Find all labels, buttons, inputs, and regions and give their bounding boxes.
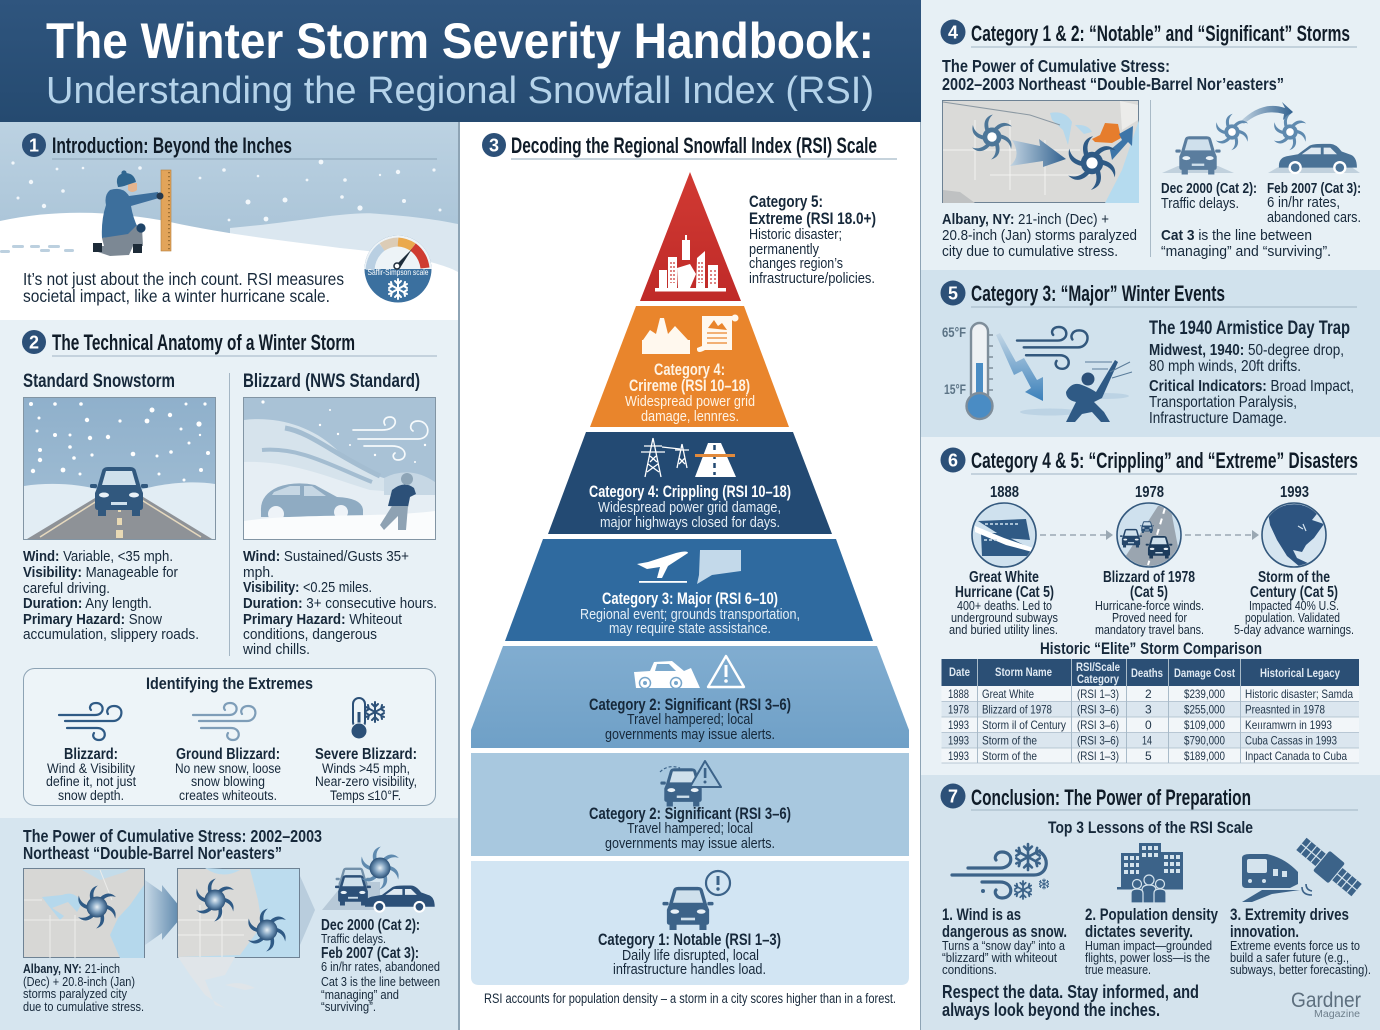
lesson 1: dangerous as snow. — [942, 922, 1067, 941]
illustration: standard snowstorm road — [24, 398, 216, 540]
text: storm of the century: population. Validated — [1245, 611, 1340, 625]
text: cat 3 line: Cat 3 is the line between — [1161, 227, 1312, 244]
text: feb 2007: abandoned cars. — [1267, 210, 1361, 226]
map: north america storms — [178, 868, 300, 1008]
sub-heading: Northeast “Double-Barrel Nor'easters” — [23, 843, 282, 863]
tier: category 2 significant lower — [471, 753, 909, 856]
table row 1888: 2 — [1145, 687, 1152, 701]
heading badge 7: 7 — [948, 786, 958, 806]
text: albany — [942, 211, 1137, 260]
table row 1993 b: Cuba Cassas in 1993 — [1245, 734, 1337, 748]
table header row: Category — [1077, 674, 1119, 686]
illustration: blizzard whiteout — [244, 398, 436, 540]
table row 1978: (RSI 3–6) — [1077, 702, 1119, 716]
tier: category 1 notable — [471, 861, 909, 985]
arrow: towards cars — [300, 876, 315, 945]
lesson 2: dictates severity. — [1085, 922, 1193, 941]
text: dec 2000: Traffic delays. — [1161, 196, 1239, 212]
heading badge 4: 4 — [948, 22, 958, 42]
icon: car and warning — [660, 761, 721, 806]
sub-heading — [942, 56, 1284, 94]
sub-heading — [23, 826, 322, 863]
intro text: It’s not just about the inch count. RSI measures — [23, 269, 344, 289]
table header row: Date — [949, 667, 970, 679]
table header row: Storm Name — [995, 667, 1052, 679]
panel: section 3 RSI pyramid — [471, 133, 909, 1006]
lesson 3: Extreme events force us to — [1230, 938, 1360, 953]
icon: thermometer — [966, 323, 993, 419]
sub-heading: 2002–2003 Northeast “Double-Barrel Nor’easters” — [942, 74, 1284, 94]
intro text: societal impact, like a winter hurricane scale. — [23, 286, 330, 306]
table row 1993 c — [948, 749, 1347, 763]
table row 1888: Historic disaster; Samda — [1245, 687, 1353, 701]
logo: gardner magazine: Gardner — [1291, 989, 1361, 1012]
title: The Winter Storm Severity Handbook: — [46, 13, 874, 69]
heading: Introduction: Beyond the Inches — [52, 133, 292, 158]
tier: category 3 major — [505, 539, 873, 641]
table row 1978: Preasnted in 1978 — [1245, 702, 1325, 716]
table row 1978: $255,000 — [1184, 702, 1225, 716]
table row 1888 — [948, 687, 1353, 701]
table header row: RSI/Scale — [1076, 662, 1120, 674]
text: great white hurricane: and buried utility lines. — [949, 623, 1058, 637]
table row 1993 c: (RSI 1–3) — [1077, 749, 1119, 763]
icon: thermometer with snowflake — [351, 698, 384, 739]
header banner — [0, 0, 921, 122]
table row 1993 b: $790,000 — [1184, 734, 1225, 748]
table header row: Historical Legacy — [1260, 668, 1341, 680]
text: category 2 lower: governments may issue alerts. — [605, 836, 775, 852]
tier: category 4 crippling navy — [548, 432, 832, 534]
text: dec 2000 and feb 2007: Dec 2000 (Cat 2): — [321, 917, 420, 934]
tier: category 2 significant upper — [471, 646, 909, 748]
tier: category 5 — [640, 172, 741, 301]
text: dec 2000 and feb 2007: Traffic delays. — [321, 932, 386, 946]
text: 1940 armistice: Midwest, 1940: 50-degree drop, — [1149, 342, 1344, 359]
text: storm of the century: Century (Cat 5) — [1250, 584, 1338, 601]
text: ground blizzard: No new snow, loose — [175, 761, 281, 776]
table row 1993 a: $109,000 — [1184, 718, 1225, 732]
icon: person measuring snow — [93, 170, 171, 256]
table row 1993 a: 0 — [1145, 718, 1152, 732]
text: severe blizzard: Temps ≤10°F. — [330, 788, 401, 803]
text: severe blizzard: Winds >45 mph, — [322, 761, 410, 776]
icon: wind gusts — [1017, 327, 1088, 369]
text: cat 3 line — [1161, 227, 1331, 260]
table row 1993 b: (RSI 3–6) — [1077, 734, 1119, 748]
table row 1978: 3 — [1145, 702, 1152, 716]
text: major: Category 3: Major (RSI 6–10) — [602, 590, 778, 608]
text: category 4 orange: Category 4: — [654, 361, 725, 379]
text: 1940 armistice: Infrastructure Damage. — [1149, 410, 1287, 427]
lesson 1: “blizzard” with whiteout — [942, 950, 1057, 965]
text: albany — [23, 961, 144, 1014]
text: category 4 orange: Crireme (RSI 10–18) — [629, 377, 750, 395]
text: dec 2000 and feb 2007: Cat 3 is the line between — [321, 975, 440, 989]
text: standard snowstorm stats: Primary Hazard: Snow — [23, 611, 162, 628]
logo: gardner magazine — [1291, 989, 1361, 1020]
text: albany: 20.8-inch (Jan) storms paralyzed — [942, 227, 1137, 244]
panel: section 6 category 4 and 5 — [921, 437, 1380, 775]
table: storm comparison — [942, 659, 1359, 763]
lesson 2: true measure. — [1085, 962, 1151, 977]
text: severe blizzard — [315, 746, 417, 803]
text: blizzard stats: Duration: 3+ consecutive hours. — [243, 595, 437, 612]
table row 1993 c: Inpact Canada to Cuba — [1245, 749, 1347, 763]
text: albany: due to cumulative stress. — [23, 999, 144, 1014]
text: ground blizzard: snow blowing — [191, 774, 265, 789]
icon: person in wind — [1020, 360, 1132, 422]
year labels — [990, 484, 1309, 501]
text: category 2 lower: Category 2: Significant (RSI 3–6) — [589, 805, 791, 823]
text: ground blizzard: Ground Blizzard: — [176, 746, 280, 763]
table row 1993 c: 5 — [1145, 749, 1152, 763]
text: dec 2000 and feb 2007 — [321, 917, 440, 1014]
text: blizzard stats: Visibility: <0.25 miles. — [243, 579, 372, 596]
lesson 3: build a safer future (e.g., — [1230, 950, 1349, 965]
text: major — [580, 590, 800, 637]
text: standard snowstorm stats — [23, 548, 199, 643]
text: albany: storms paralyzed city — [23, 986, 127, 1001]
text: standard snowstorm stats: accumulation, slippery roads. — [23, 626, 199, 643]
icon: storms over car — [1162, 102, 1360, 174]
map: northeast storm — [24, 868, 144, 958]
subtitle: Understanding the Regional Snowfall Index (RSI) — [46, 70, 874, 112]
map: usa storm track — [942, 100, 1139, 203]
year labels: 1978 — [1135, 484, 1164, 501]
table row 1978: 1978 — [948, 702, 969, 716]
text: blizzard of 1978: Hurricane-force winds. — [1095, 599, 1204, 613]
lesson 3: 3. Extremity drives — [1230, 905, 1349, 924]
text: crippling — [589, 483, 791, 531]
heading badge 1: 1 — [29, 136, 39, 156]
intro text — [23, 269, 344, 306]
lesson 1: 1. Wind is as — [942, 905, 1021, 924]
lesson 2: 2. Population density — [1085, 905, 1218, 924]
text: category 4 orange: Widespread power grid — [625, 394, 755, 410]
callout: category 5 text: infrastructure/policies. — [749, 271, 875, 287]
table header row: Damage Cost — [1174, 668, 1235, 680]
text: albany: Albany, NY: 21-inch — [23, 961, 120, 976]
table heading: Historic “Elite” Storm Comparison — [1040, 639, 1262, 658]
text: cat 3 line: “managing” and “surviving”. — [1161, 243, 1331, 260]
text: crippling: Category 4: Crippling (RSI 10–18) — [589, 483, 791, 501]
column divider right — [920, 122, 922, 1030]
heading badge 4 — [940, 20, 966, 44]
text: great white hurricane: Hurricane (Cat 5) — [955, 584, 1054, 601]
column heading: standard snowstorm: Standard Snowstorm — [23, 371, 175, 392]
table row 1993 b: Storm of the — [982, 734, 1037, 748]
heading badge 6: 6 — [948, 450, 958, 470]
text: category 1 — [598, 931, 781, 978]
text: dec 2000 and feb 2007: 6 in/hr rates, abandoned — [321, 960, 440, 974]
text: category 2: Travel hampered; local — [627, 712, 753, 728]
text: blizzard: Blizzard: — [64, 746, 118, 763]
text: dec 2000: Dec 2000 (Cat 2): — [1161, 181, 1257, 197]
text: ground blizzard — [175, 746, 281, 803]
panel: section 1 introduction — [0, 122, 458, 320]
text: standard snowstorm stats: Wind: Variable, <35 mph. — [23, 548, 173, 565]
table row 1993 b: 14 — [1142, 734, 1152, 748]
icon: severity gauge — [364, 236, 432, 302]
text: blizzard stats: wind chills. — [242, 641, 310, 658]
text: blizzard stats — [242, 548, 437, 658]
text: standard snowstorm stats: Duration: Any length. — [23, 595, 152, 612]
text: dec 2000 — [1161, 181, 1257, 212]
text: feb 2007: 6 in/hr rates, — [1267, 195, 1340, 211]
column divider left — [458, 122, 460, 1030]
text: category 2 — [589, 696, 791, 743]
year labels: 1993 — [1280, 484, 1309, 501]
column heading: blizzard: Blizzard (NWS Standard) — [243, 371, 420, 392]
table row 1978: Blizzard of 1978 — [982, 702, 1052, 716]
text: storm of the century: 5-day advance warnings. — [1234, 623, 1354, 637]
text: feb 2007 — [1267, 181, 1361, 226]
icon: train and satellite — [1242, 834, 1365, 902]
text: blizzard stats: conditions, dangerous — [243, 626, 377, 643]
text: feb 2007: Feb 2007 (Cat 3): — [1267, 181, 1361, 197]
text: dec 2000 and feb 2007: “surviving”. — [321, 1000, 376, 1014]
lesson 1: conditions. — [942, 962, 997, 977]
lesson 3 — [1230, 905, 1371, 977]
text: dec 2000 and feb 2007: “managing” and — [321, 988, 399, 1002]
text: category 4 orange — [625, 361, 755, 425]
heading: The Technical Anatomy of a Winter Storm — [52, 330, 355, 355]
table header row — [949, 662, 1341, 686]
closing statement: always look beyond the inches. — [942, 1000, 1160, 1020]
lesson 2: flights, power loss—is the — [1085, 950, 1210, 965]
text: major: may require state assistance. — [609, 621, 771, 637]
text: category 4 orange: damage, lennres. — [641, 409, 739, 425]
text: great white hurricane: underground subways — [951, 611, 1058, 625]
text: category 1: Category 1: Notable (RSI 1–3) — [598, 931, 781, 949]
closing statement: Respect the data. Stay informed, and — [942, 982, 1199, 1002]
text: blizzard of 1978: Proved need for — [1112, 611, 1187, 625]
icon: car with alert — [662, 871, 730, 930]
text: category 2 lower — [589, 805, 791, 852]
table row 1888: Great White — [982, 687, 1034, 701]
callout: category 5 text: changes region’s — [749, 256, 843, 272]
heading: Decoding the Regional Snowfall Index (RSI) Scale — [511, 133, 877, 158]
text: albany: (Dec) + 20.8-inch (Jan) — [23, 974, 135, 989]
arrow: 1888 to 1978 — [1040, 530, 1113, 540]
table row 1888: 1888 — [948, 687, 969, 701]
heading badge 3: 3 — [489, 136, 499, 156]
lesson 3: innovation. — [1230, 922, 1299, 941]
table row 1993 c: 1993 — [948, 749, 969, 763]
text: great white hurricane: Great White — [969, 569, 1039, 586]
text: category 2 lower: Travel hampered; local — [627, 821, 753, 837]
text: crippling: Widespread power grid damage, — [598, 500, 781, 516]
lesson 2 — [1085, 905, 1218, 977]
icon: globe north america — [1262, 503, 1326, 567]
callout: category 5 text — [749, 193, 876, 287]
text: blizzard stats: Primary Hazard: Whiteout — [243, 611, 403, 628]
arrow: 1978 to 1993 — [1185, 530, 1259, 540]
heading badge 2 — [22, 330, 46, 354]
caption: RSI accounts for population density – a storm in a city scores higher than in a forest. — [484, 991, 896, 1006]
text: dec 2000 and feb 2007: Feb 2007 (Cat 3): — [321, 945, 419, 962]
text: standard snowstorm stats: Visibility: Manageable for — [23, 564, 178, 581]
text: major: Regional event; grounds transportation, — [580, 607, 800, 623]
panel: section 2 technical anatomy — [0, 320, 458, 818]
panel: section 5 category 3 — [921, 270, 1380, 437]
text: blizzard stats: Wind: Sustained/Gusts 35+ — [243, 548, 409, 565]
table row 1888: (RSI 1–3) — [1077, 687, 1119, 701]
table header row: Deaths — [1131, 668, 1163, 680]
text: great white hurricane — [949, 569, 1058, 637]
arrow: temperature drop — [996, 333, 1043, 401]
text: blizzard of 1978: Blizzard of 1978 — [1103, 569, 1195, 586]
text: storm of the century — [1234, 569, 1354, 637]
table row 1888: $239,000 — [1184, 687, 1225, 701]
text: blizzard: Wind & Visibility — [47, 761, 135, 776]
icon: power towers and road — [641, 438, 736, 477]
lesson 1 — [942, 905, 1067, 977]
text: ground blizzard: creates whiteouts. — [179, 788, 277, 803]
heading badge 3 — [482, 133, 506, 157]
sub-heading: Top 3 Lessons of the RSI Scale — [1048, 818, 1253, 837]
table row 1993 b: 1993 — [948, 734, 969, 748]
icon: severity gauge: Saffir-Simpson scale — [368, 267, 429, 277]
tier: category 4 extreme orange — [590, 306, 789, 427]
text: storm of the century: Impacted 40% U.S. — [1249, 599, 1339, 613]
table row 1993 c: $189,000 — [1184, 749, 1225, 763]
temperature labels: 65°F — [942, 325, 966, 340]
year labels: 1888 — [990, 484, 1019, 501]
text: blizzard stats: mph. — [243, 564, 274, 581]
text: category 2: Category 2: Significant (RSI 3–6) — [589, 696, 791, 714]
text: 1940 armistice: Transportation Paralysis, — [1149, 394, 1297, 411]
lesson 2: Human impact—grounded — [1085, 938, 1212, 953]
logo: gardner magazine: Magazine — [1314, 1009, 1360, 1020]
icon: damaged city — [655, 235, 726, 292]
icon: crashed truck and warning — [634, 656, 744, 688]
sub-heading: The Power of Cumulative Stress: 2002–2003 — [23, 826, 322, 846]
snowfall dots and hills — [0, 160, 458, 320]
heading: Conclusion: The Power of Preparation — [971, 785, 1251, 810]
panel: identifying the extremes — [24, 668, 436, 806]
callout: category 5 text: permanently — [749, 242, 820, 258]
text: blizzard — [46, 746, 136, 803]
callout: category 5 text: Extreme (RSI 18.0+) — [749, 210, 876, 228]
heading badge 7 — [940, 784, 966, 808]
text: albany: city due to cumulative stress. — [942, 243, 1118, 260]
text: albany: Albany, NY: 21-inch (Dec) + — [942, 211, 1109, 228]
text: category 2: governments may issue alerts. — [605, 727, 775, 743]
heading badge 6 — [940, 448, 966, 472]
text: 1940 armistice — [1149, 318, 1354, 427]
text: 1940 armistice: Critical Indicators: Broad Impact, — [1149, 378, 1354, 395]
table row 1993 a: (RSI 3–6) — [1077, 718, 1119, 732]
text: 1940 armistice: 80 mph winds, 20ft drifts. — [1149, 358, 1301, 375]
temperature labels: 15°F — [944, 382, 966, 397]
table row 1993 a: 1993 — [948, 718, 969, 732]
text: storm of the century: Storm of the — [1258, 569, 1330, 586]
icon: stranded cars on highway — [1117, 503, 1182, 568]
text: blizzard: snow depth. — [58, 788, 124, 803]
icon: buried train — [972, 503, 1036, 567]
table row 1993 a — [948, 718, 1332, 732]
table row 1993 c: Storm of the — [982, 749, 1037, 763]
icon: plane and state — [637, 550, 741, 584]
icon: blizzard wind — [59, 703, 121, 740]
text: blizzard of 1978: mandatory travel bans. — [1095, 623, 1204, 637]
panel: section 7 conclusion — [921, 775, 1380, 1030]
text: blizzard: define it, not just — [46, 774, 136, 789]
arrow: between maps — [145, 880, 185, 945]
icon: wind and snow — [952, 844, 1048, 899]
sub-heading: Identifying the Extremes — [146, 674, 313, 693]
text: category 1: infrastructure handles load. — [613, 962, 766, 978]
heading badge 1 — [22, 133, 46, 157]
lesson 1: Turns a “snow day” into a — [942, 938, 1066, 953]
heading badge 2: 2 — [29, 332, 39, 352]
text: standard snowstorm stats: careful driving. — [23, 580, 110, 597]
icon: ground blizzard wind — [193, 703, 255, 740]
closing statement — [942, 982, 1199, 1020]
icon: city and scroll — [642, 314, 738, 354]
text: category 1: Daily life disrupted, local — [622, 948, 759, 964]
heading badge 5 — [940, 280, 966, 306]
table row 1993 a: Keııramwrn in 1993 — [1245, 718, 1332, 732]
panel: section 4 category 1 and 2 — [921, 0, 1380, 270]
sub-heading: The Power of Cumulative Stress: — [942, 56, 1170, 76]
text: great white hurricane: 400+ deaths. Led to — [957, 599, 1052, 613]
temperature labels — [942, 325, 966, 397]
table row 1993 a: Storm il of Century — [982, 718, 1066, 732]
text: blizzard of 1978: (Cat 5) — [1130, 584, 1168, 601]
text: crippling: major highways closed for days. — [600, 515, 780, 531]
icon: cars with storm — [322, 845, 435, 913]
text: severe blizzard: Severe Blizzard: — [315, 746, 417, 763]
text: blizzard of 1978 — [1095, 569, 1204, 637]
callout: category 5 text: Historic disaster; — [749, 227, 842, 243]
text: severe blizzard: Near-zero visibility, — [315, 774, 417, 789]
callout: category 5 text: Category 5: — [749, 193, 823, 211]
table row 1993 b — [948, 734, 1337, 748]
heading badge 5: 5 — [948, 284, 958, 304]
panel: cumulative stress left — [0, 818, 458, 1030]
heading: Category 3: “Major” Winter Events — [971, 281, 1225, 306]
table row 1978 — [948, 702, 1325, 716]
icon: city and population — [1117, 843, 1183, 903]
